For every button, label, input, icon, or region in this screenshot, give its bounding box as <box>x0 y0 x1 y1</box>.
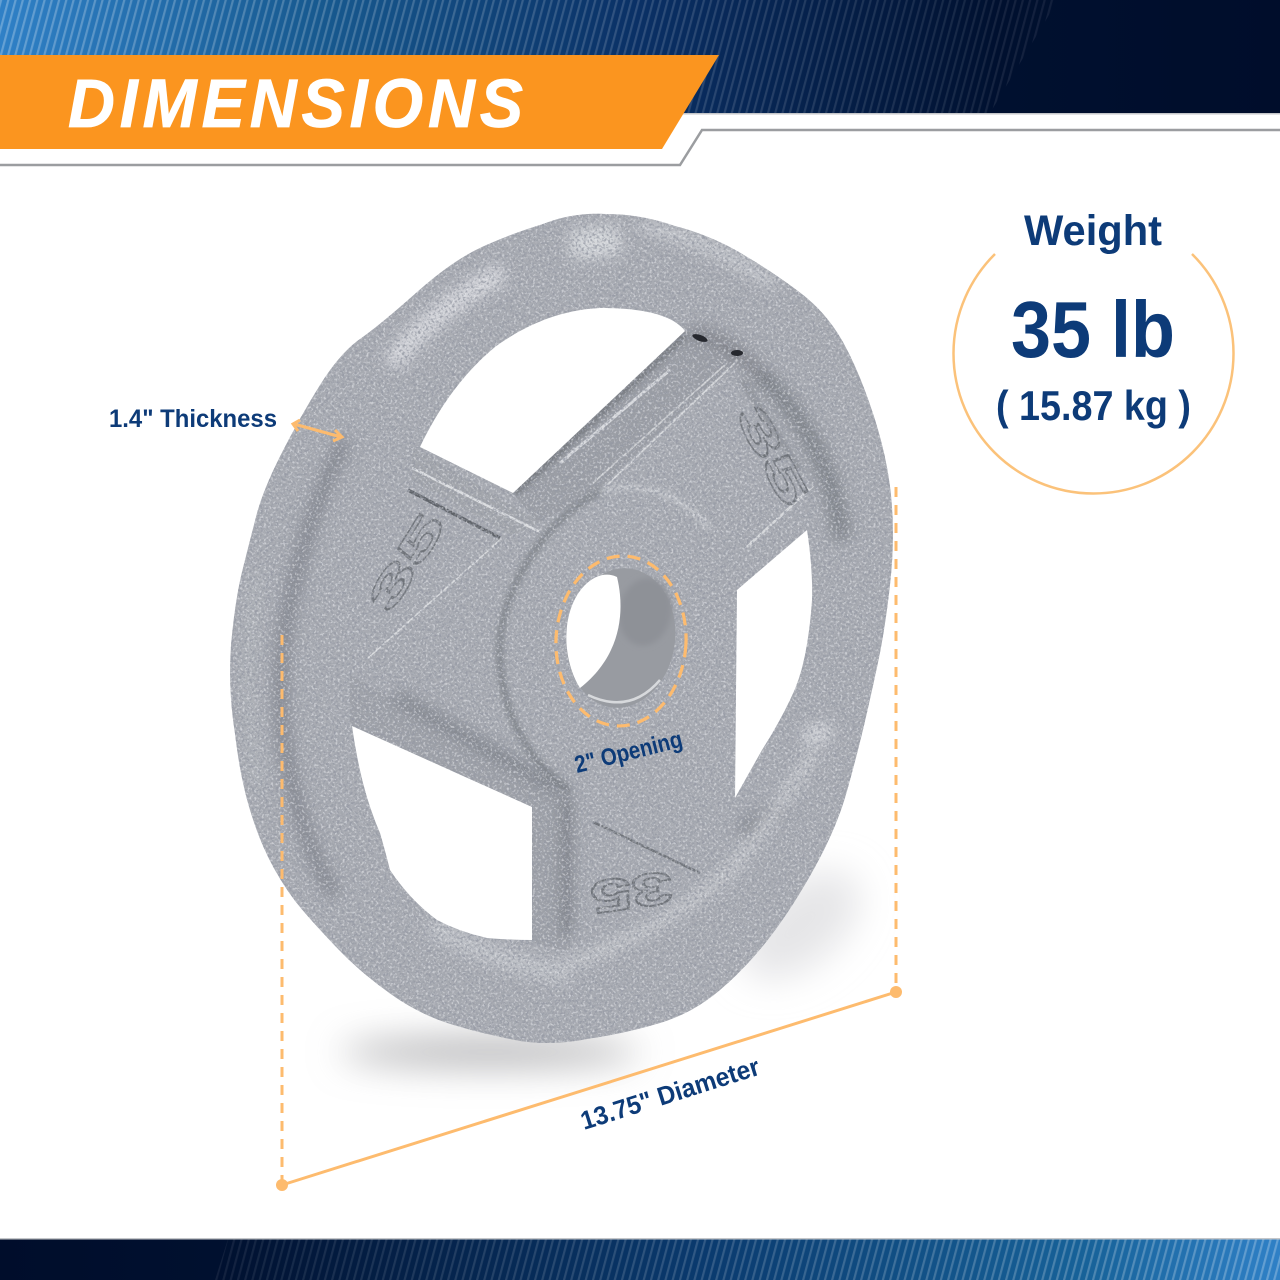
callout ring <box>954 254 1234 493</box>
embossed weight marks: 35 <box>587 861 676 923</box>
center bore <box>558 561 684 715</box>
hub crease <box>500 487 710 790</box>
thickness label: 1.4" Thickness <box>109 405 277 433</box>
header outline rule <box>0 130 1280 165</box>
spokes <box>350 331 745 952</box>
kilograms value: ( 15.87 kg ) <box>996 382 1191 429</box>
weight heading: Weight <box>1024 207 1162 255</box>
thickness arrow <box>293 420 342 441</box>
header band <box>0 0 1280 114</box>
plate base <box>230 214 893 1043</box>
plate shadow <box>340 849 879 1066</box>
diameter dimension <box>276 487 902 1191</box>
opening label: 2" Opening <box>572 726 685 779</box>
embossed weight marks: 35 <box>727 397 818 514</box>
weight plate <box>200 190 920 1070</box>
footer band <box>0 1238 1280 1280</box>
panels <box>368 360 814 874</box>
ring and spoke shading <box>249 226 842 975</box>
embossed weight marks: 35 <box>358 504 454 620</box>
opening outline <box>552 553 690 729</box>
embossed weight marks <box>358 397 818 923</box>
weight callout <box>954 207 1234 493</box>
title banner <box>0 55 719 149</box>
plate windows <box>352 308 812 940</box>
pounds value: 35 lb <box>1011 285 1175 374</box>
casting marks <box>691 332 743 356</box>
title: DIMENSIONS <box>68 65 523 142</box>
hammertone texture <box>230 214 893 1043</box>
diameter label: 13.75" Diameter <box>577 1051 763 1136</box>
